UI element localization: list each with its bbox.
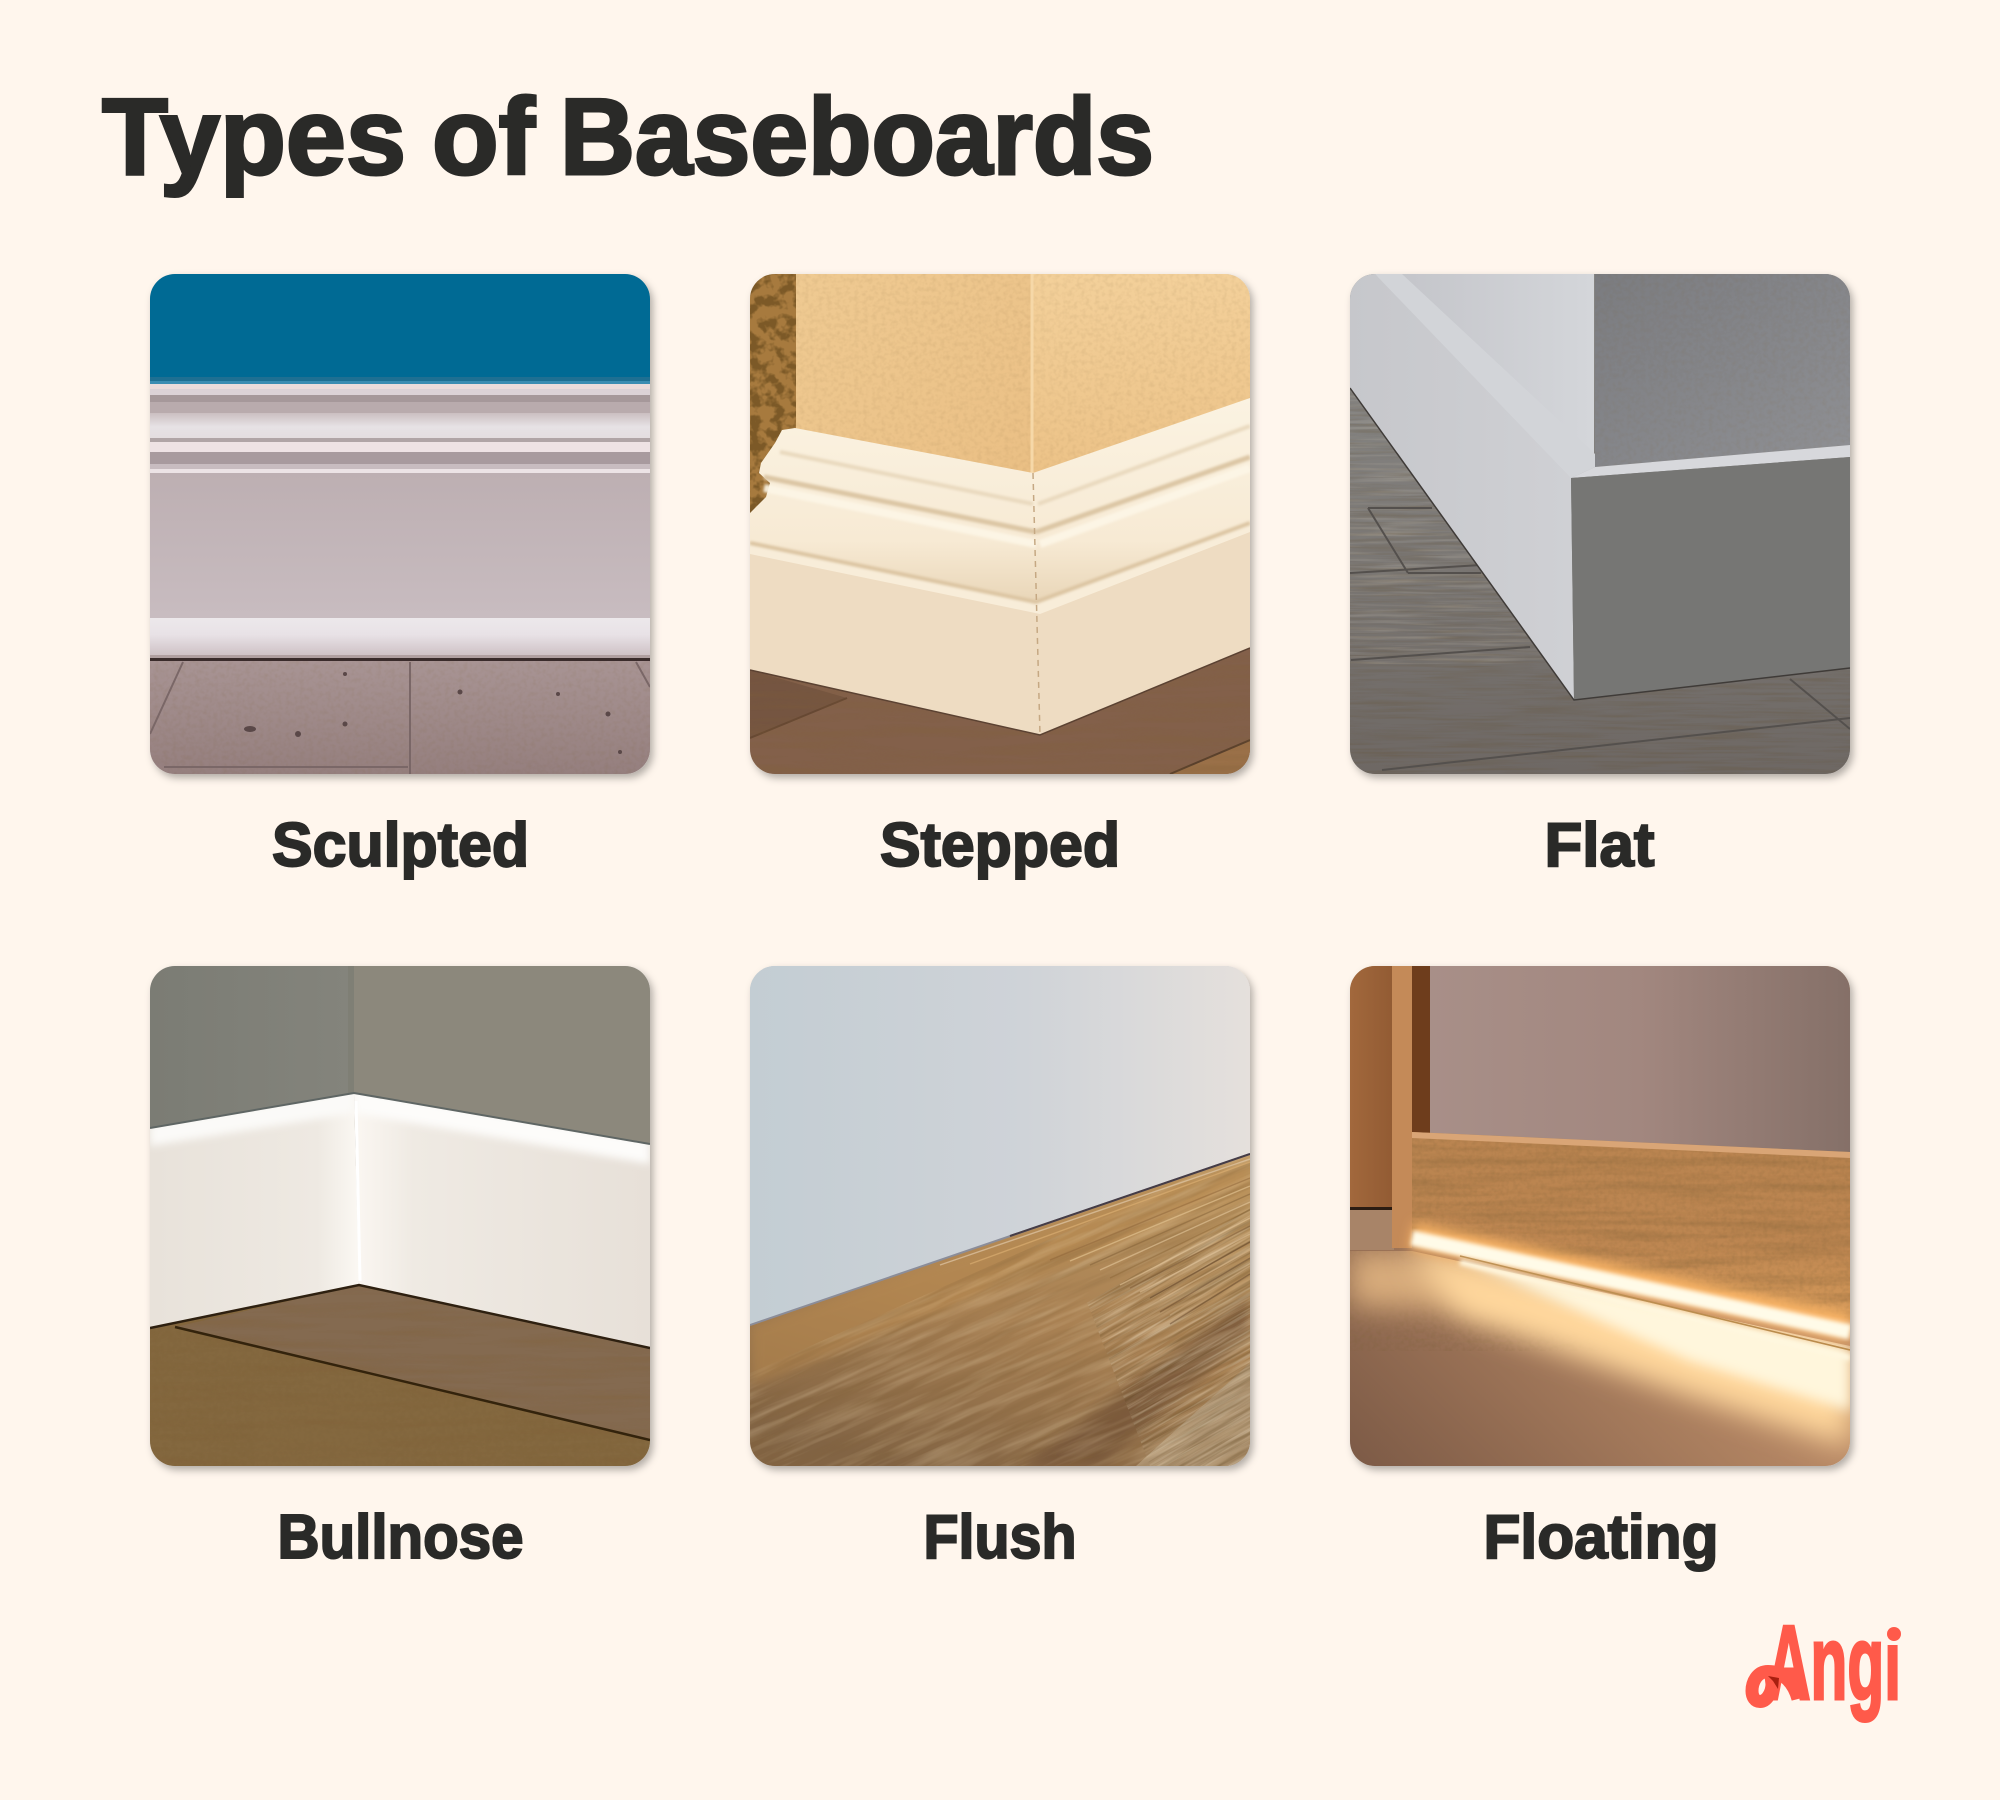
panel: flat — [1350, 274, 1850, 880]
title — [102, 76, 1154, 198]
panel: flush — [748, 966, 1258, 1560]
photo: flush baseboard — [748, 966, 1258, 1474]
label: sculpted: Sculpted — [272, 811, 529, 880]
photo: sculpted baseboard — [150, 274, 650, 774]
panel: stepped — [750, 274, 1250, 880]
label: bullnose: Bullnose — [278, 1503, 524, 1572]
title: of — [432, 76, 536, 198]
label: flush: Flush — [924, 1503, 1076, 1572]
logo: Angi — [1752, 1604, 1906, 1722]
photo: bullnose baseboard — [150, 966, 650, 1466]
logo wordmark: Angi — [1767, 1604, 1901, 1722]
logo i-dot — [1882, 1612, 1906, 1645]
panel: floating — [1350, 966, 1850, 1572]
panel: bullnose — [150, 966, 650, 1572]
label: flat: Flat — [1544, 811, 1654, 880]
photo: stepped baseboard — [750, 274, 1250, 774]
label: floating: Floating — [1484, 1503, 1718, 1572]
label: stepped: Stepped — [880, 811, 1120, 880]
title: Types — [102, 76, 406, 198]
title: Baseboards — [560, 76, 1154, 198]
photo: flat baseboard — [1350, 274, 1850, 774]
photo: floating baseboard with LED light — [1350, 966, 1850, 1466]
logo swash loop — [1752, 1672, 1798, 1702]
panel: sculpted — [150, 274, 650, 880]
